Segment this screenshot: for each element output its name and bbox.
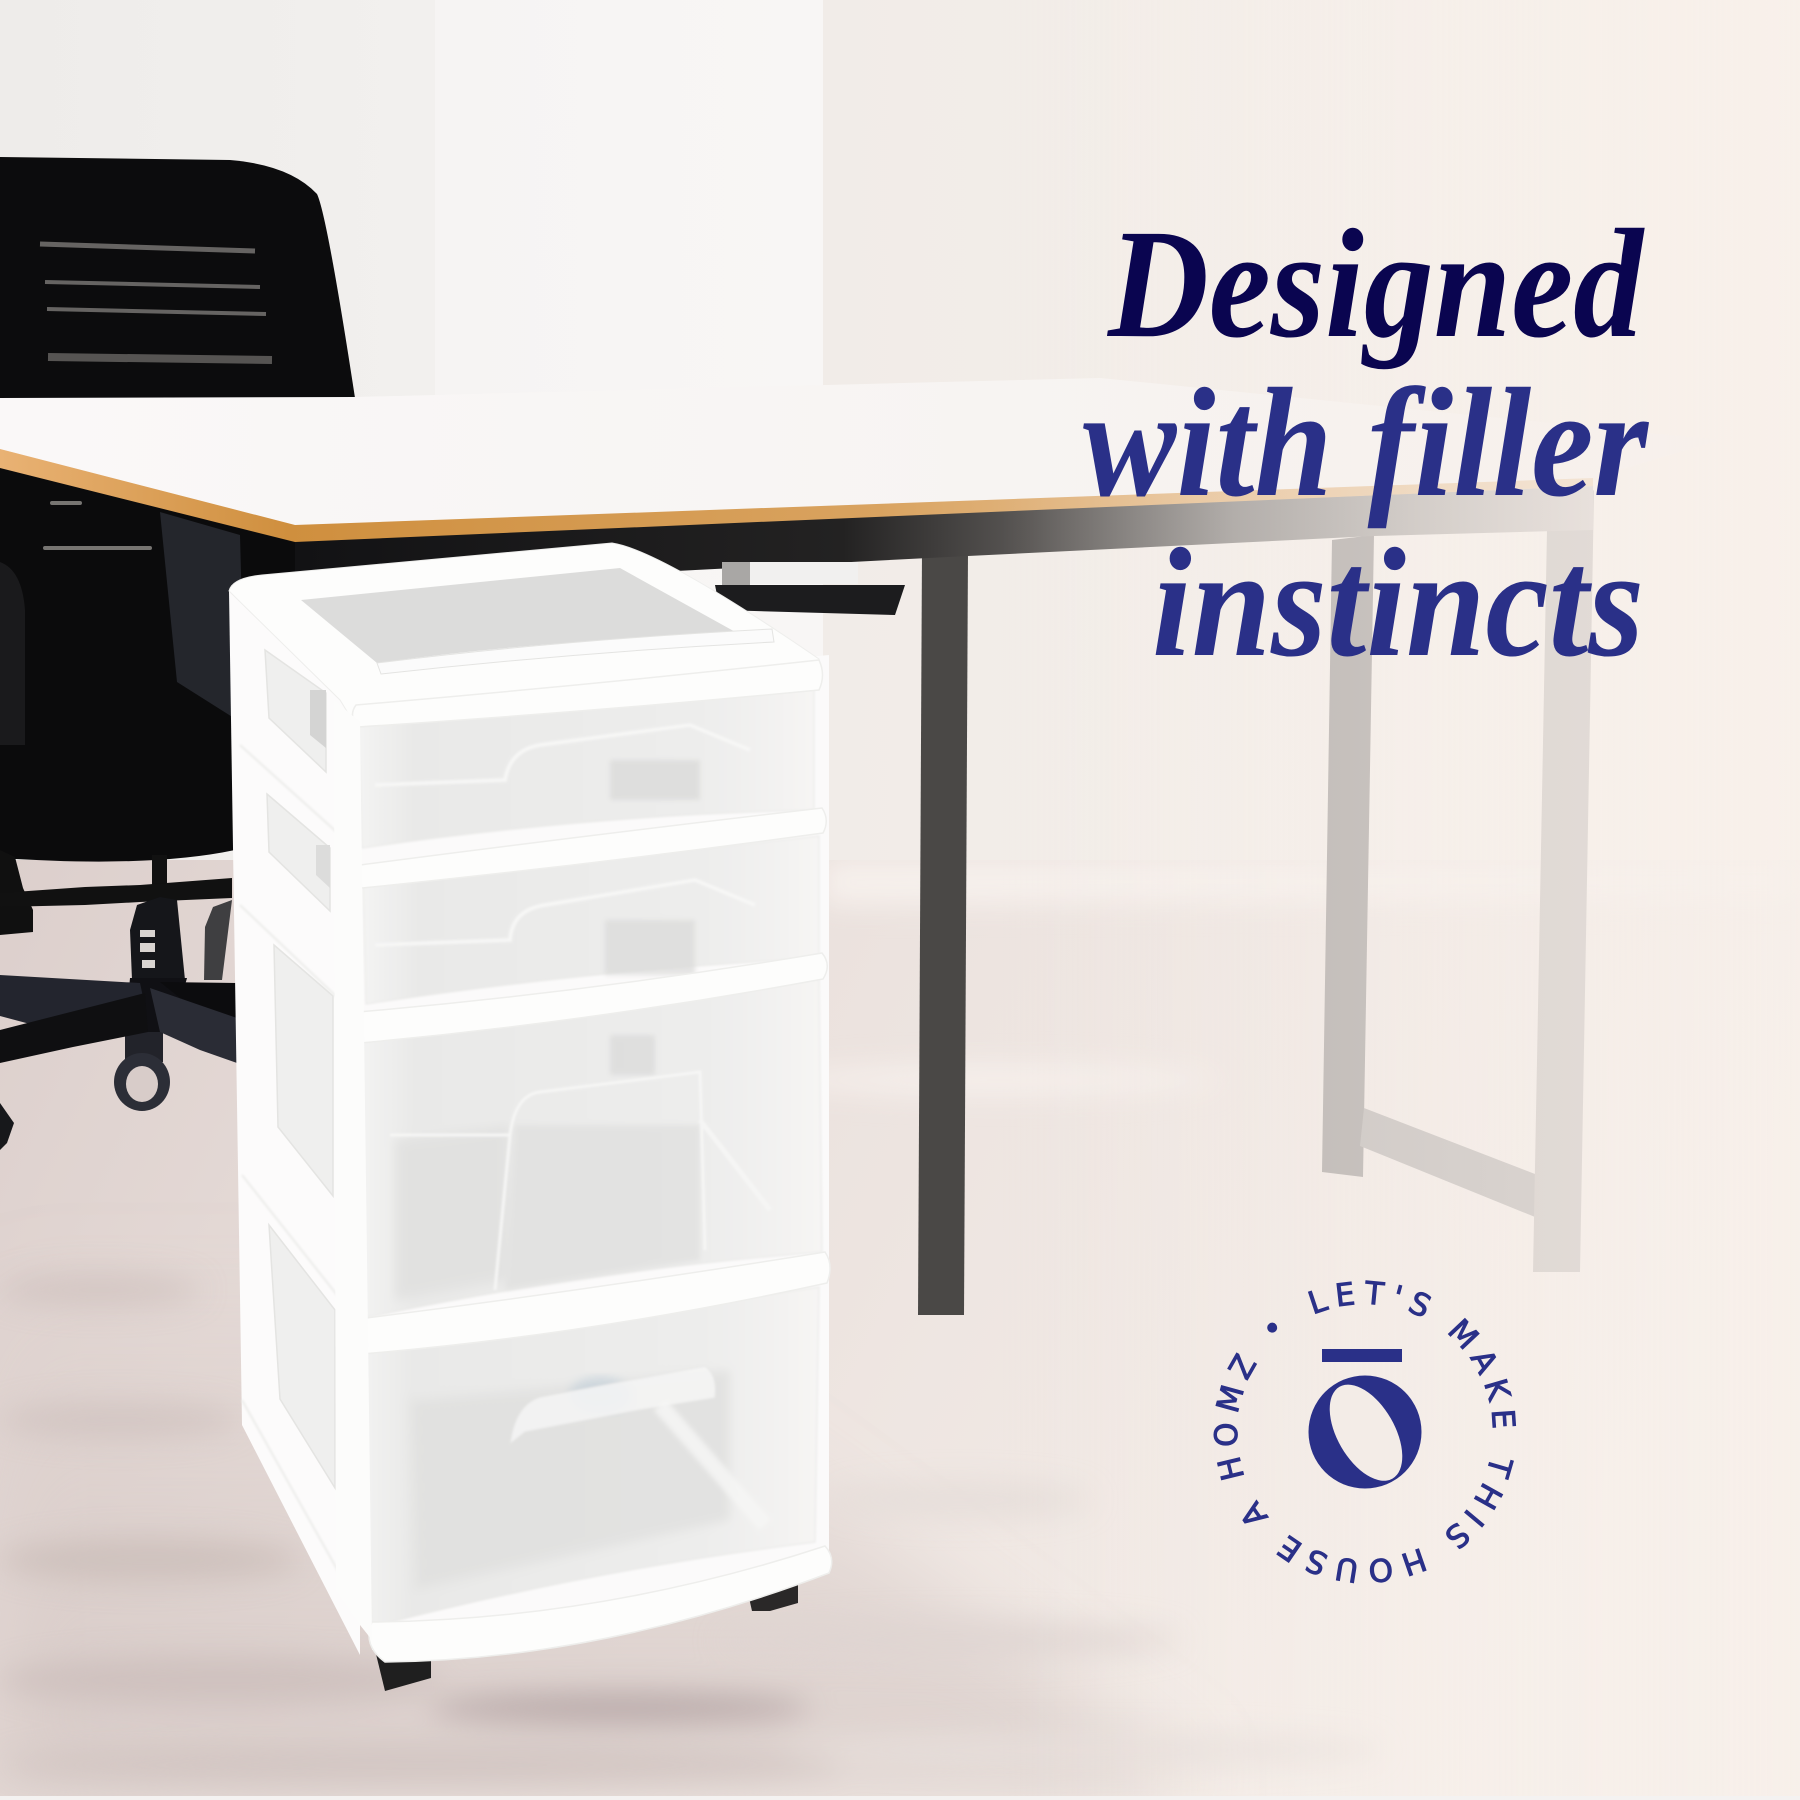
title line 3: instincts <box>1152 516 1644 689</box>
desk front-right leg <box>1533 490 1594 1272</box>
cabinet front fill <box>356 655 829 1650</box>
wall: right section <box>823 0 1800 870</box>
lid recess <box>301 568 739 663</box>
title line 2: with filler <box>1083 356 1649 529</box>
drawer 4 <box>356 1287 819 1627</box>
drawer 3 <box>358 979 822 1319</box>
lid <box>229 543 819 726</box>
title <box>1083 197 1649 689</box>
star base legs <box>0 975 237 1063</box>
clamp bracket under the desk <box>715 562 905 615</box>
desk back-middle leg <box>1322 535 1374 1177</box>
partial wheel at edge <box>0 1103 14 1150</box>
chair backrest <box>0 157 355 398</box>
backrest slats <box>40 244 272 360</box>
front corner post <box>334 700 372 1640</box>
slits <box>45 503 150 548</box>
wall: left section <box>0 0 435 870</box>
armrest <box>0 562 25 745</box>
back support bracket <box>160 512 245 725</box>
circular slogan: LET'S MAKE THIS HOUSE A HOMZ • <box>1214 1280 1516 1584</box>
lid front raised strip <box>377 629 774 674</box>
desk <box>0 378 1720 1315</box>
floor <box>0 860 1280 1796</box>
office chair <box>0 157 355 1150</box>
side rail shading <box>240 745 360 1610</box>
right side soft overlay <box>1000 0 1800 1796</box>
side windows <box>265 650 335 1488</box>
desk under-frame <box>295 486 1593 590</box>
caster left <box>375 1650 431 1691</box>
chair base bar <box>0 878 232 907</box>
circular logo badge <box>1214 1280 1516 1584</box>
room background <box>0 0 1280 1796</box>
logo bar <box>1322 1349 1402 1362</box>
drawer 4 handle <box>510 1366 716 1444</box>
logo ring inner cut <box>1315 1373 1417 1493</box>
seat post <box>152 855 167 885</box>
tabletop orange edge <box>0 449 1593 542</box>
drawer rims <box>352 660 832 1662</box>
plastic drawer unit <box>229 543 832 1691</box>
rear caster <box>204 900 232 980</box>
wall: middle section <box>435 0 823 870</box>
seat and under-desk dark mass <box>0 455 300 862</box>
tabletop <box>0 378 1720 525</box>
gas lift hub <box>130 897 185 980</box>
logo ring <box>1308 1376 1422 1488</box>
drawer 2 <box>363 836 819 1004</box>
title line 1: Designed <box>1106 197 1645 370</box>
desk center leg <box>918 550 968 1315</box>
wheel <box>114 1053 170 1111</box>
drawer 1 <box>358 688 814 848</box>
bottom edge strip <box>0 1796 1800 1800</box>
cabinet side body <box>229 575 360 1655</box>
desk lower crossbar <box>1360 1108 1535 1217</box>
left foot shape <box>0 850 33 935</box>
caster right <box>745 1580 798 1611</box>
